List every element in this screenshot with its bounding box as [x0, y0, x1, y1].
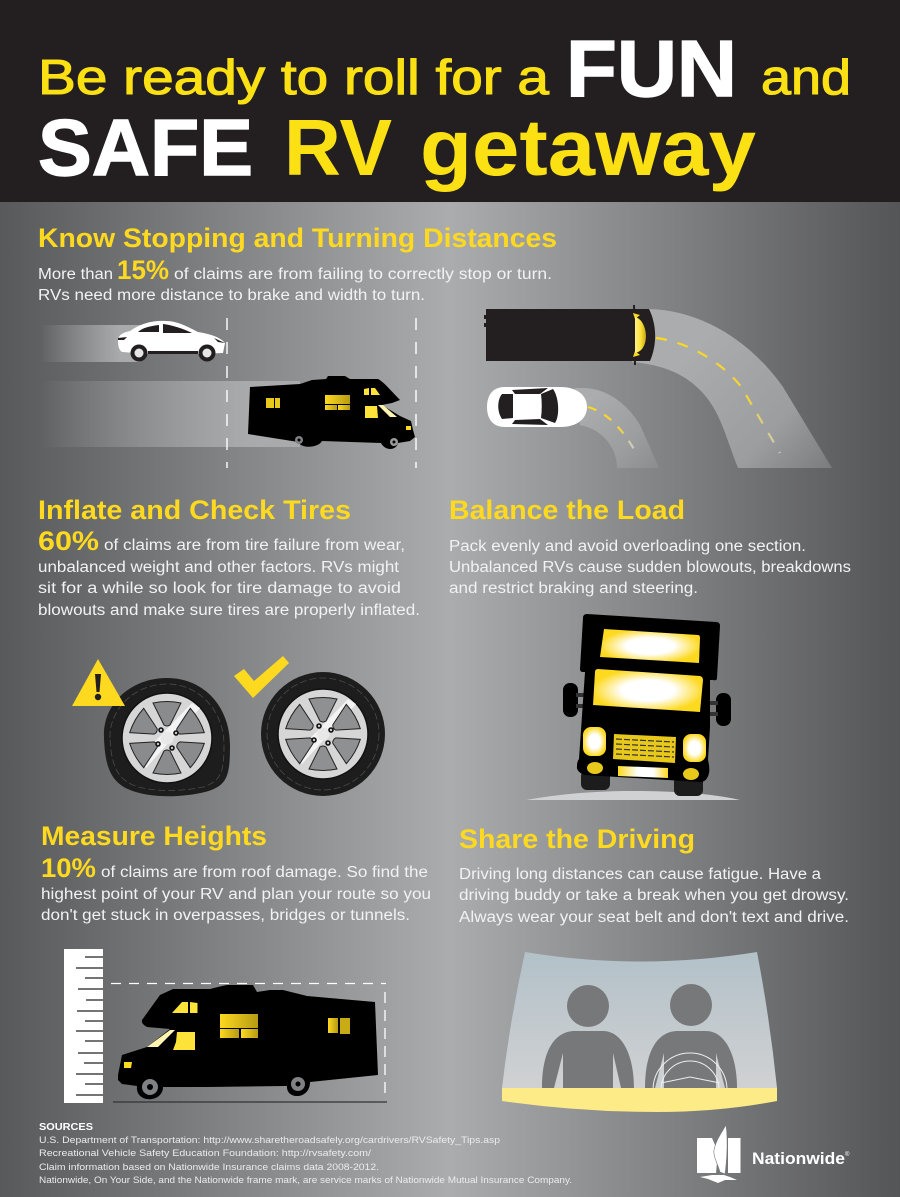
text: heights: of claims are from roof damage. So find the	[101, 864, 428, 881]
title banner: and	[761, 51, 851, 105]
text: heights: 10%	[41, 853, 96, 883]
icon: white car side view	[118, 321, 225, 362]
title banner	[0, 0, 900, 202]
icon: white car top view	[487, 387, 587, 427]
text: driving: driving buddy or take a break when you get drowsy.	[459, 887, 849, 904]
text: heights	[41, 853, 431, 924]
text: balance: Unbalanced RVs cause sudden blowouts, breakdowns	[449, 559, 851, 576]
text: balance: Pack evenly and avoid overloading one section.	[449, 538, 806, 555]
title banner: SAFE	[38, 103, 253, 192]
Nationwide logo: ®	[845, 1151, 850, 1158]
text: tires: unbalanced weight and other factors. RVs might	[38, 559, 400, 576]
text: tires	[38, 526, 420, 619]
road: small curve	[575, 388, 659, 468]
title banner: FUN	[566, 24, 737, 113]
sources: SOURCES	[39, 1121, 93, 1133]
icon: ruler	[64, 949, 103, 1103]
text: tires: blowouts and make sure tires are properly inflated.	[38, 602, 420, 619]
text: tires: 60%	[38, 526, 99, 556]
heading: driving: Share the Driving	[459, 824, 695, 854]
icon: truck top view	[484, 305, 655, 365]
sources: Recreational Vehicle Safety Education Foundation: http://rvsafety.com/	[39, 1148, 371, 1159]
turning distance diagram	[484, 305, 832, 468]
icon: RV side view	[248, 376, 415, 449]
height diagram	[64, 949, 387, 1103]
title banner: getaway	[420, 103, 757, 192]
text: heights: highest point of your RV and plan your route so you	[41, 886, 431, 903]
icon: RV front view	[526, 614, 740, 800]
title banner: Be ready to roll for a	[38, 51, 550, 105]
text: balance	[449, 538, 851, 597]
heading: stopping and turning: Know Stopping and Turning Distances	[38, 223, 557, 253]
icon: flat tire	[104, 678, 230, 796]
icon: check mark	[234, 656, 289, 698]
text: driving: Always wear your seat belt and don't text and drive.	[459, 909, 849, 926]
text: stopping and turning: 15%	[117, 255, 169, 285]
sources: U.S. Department of Transportation: http://www.sharetheroadsafely.org/cardrivers/RVSafety_Tips.asp	[39, 1135, 500, 1146]
text: heights: don't get stuck in overpasses, bridges or tunnels.	[41, 907, 410, 924]
heading: tires: Inflate and Check Tires	[38, 495, 351, 525]
text: tires: sit for a while so look for tire damage to avoid	[38, 580, 401, 597]
stopping distance diagram	[40, 318, 416, 468]
icon: windshield with two people	[502, 952, 777, 1127]
text: stopping and turning: More than	[38, 266, 113, 283]
text: tires: of claims are from tire failure from wear,	[104, 537, 405, 554]
icon: properly inflated tire	[261, 672, 385, 796]
Nationwide logo: Nationwide	[752, 1149, 845, 1168]
icon: driver	[645, 984, 737, 1088]
text: balance: and restrict braking and steering.	[449, 580, 698, 597]
title banner: RV	[284, 103, 392, 192]
sources	[39, 1121, 572, 1186]
text: driving: Driving long distances can cause fatigue. Have a	[459, 866, 822, 883]
heading: balance: Balance the Load	[449, 495, 685, 525]
text: driving	[459, 866, 849, 926]
road: large curve	[632, 309, 832, 468]
heading: heights: Measure Heights	[41, 821, 267, 851]
sources: Nationwide, On Your Side, and the Nationwide frame mark, are service marks of Nationwide Mutual Insurance Company.	[39, 1175, 572, 1186]
text: stopping and turning	[38, 255, 552, 304]
icon: warning triangle	[72, 659, 125, 706]
Nationwide logo	[697, 1125, 850, 1183]
sources: Claim information based on Nationwide Insurance claims data 2008-2012.	[39, 1162, 379, 1173]
text: stopping and turning: RVs need more distance to brake and width to turn.	[38, 287, 425, 304]
icon: RV side view with height	[118, 985, 378, 1099]
text: stopping and turning: of claims are from failing to correctly stop or turn.	[174, 266, 552, 283]
icon: passenger	[542, 985, 634, 1088]
